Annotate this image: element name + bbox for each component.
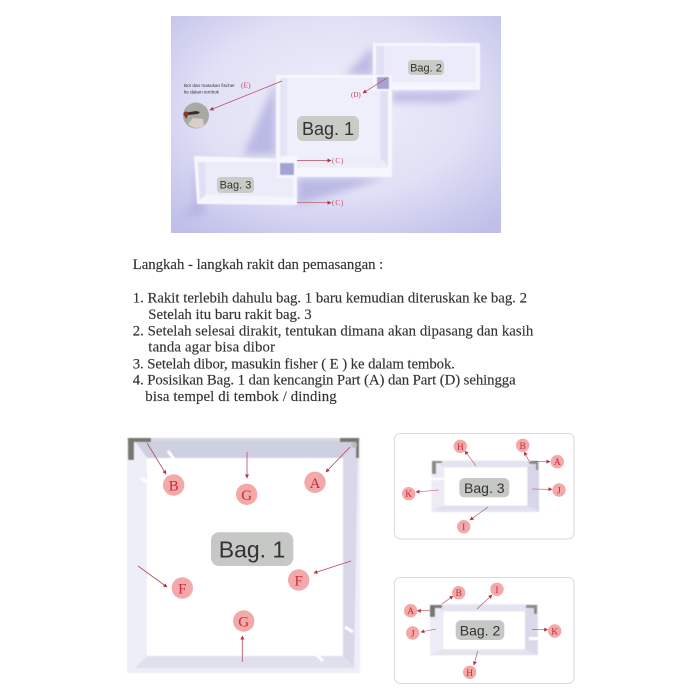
shelf: Bag 1 <box>276 75 392 177</box>
metal brackets <box>128 438 151 460</box>
callout H: H <box>466 669 473 679</box>
callout A: A <box>554 458 561 468</box>
callout G top <box>236 452 257 505</box>
note: drill and insert fischer <box>184 80 251 94</box>
step 1 <box>133 291 527 323</box>
callout G bottom: G <box>238 614 249 630</box>
step 1: 1. Rakit terlebih dahulu bag. 1 baru kemudian diteruskan ke bag. 2 <box>133 291 527 307</box>
callout A: A <box>310 476 321 492</box>
shelf: Bag 3 <box>194 156 297 205</box>
callout F left <box>138 566 193 599</box>
heading: Langkah - langkah rakit dan pemasangan : <box>133 257 383 273</box>
shelf frame <box>127 438 360 673</box>
arrow: part D <box>363 78 387 93</box>
arrow: part C upper <box>297 160 331 162</box>
callout H <box>463 651 478 679</box>
shelf shadows <box>180 46 480 216</box>
shelf frame <box>431 461 539 512</box>
callout H <box>454 440 476 466</box>
label: Bag. 1: Bag. 1 <box>219 536 285 562</box>
label: Bag. 3 on photo <box>217 177 254 193</box>
label: Bag. 2 <box>456 620 504 640</box>
callout A <box>404 604 430 617</box>
arrow: to drilling circle <box>210 81 282 110</box>
callout K: K <box>405 490 412 500</box>
callout J <box>406 626 436 640</box>
shelf frame <box>430 604 538 655</box>
label: Bag. 3 on photo: Bag. 3 <box>220 180 251 192</box>
callout B <box>147 443 184 496</box>
step 2: 2. Setelah selesai dirakit, tentukan dimana akan dipasang dan kasih <box>133 323 534 339</box>
callout F left: F <box>178 582 186 598</box>
label: Bag. 1 on photo <box>297 116 359 141</box>
step 2 <box>133 323 534 356</box>
label: part C lower: (C) <box>332 199 344 207</box>
panel: Bag 2 diagram <box>394 578 574 684</box>
callout B <box>516 439 529 461</box>
callout J: J <box>411 630 415 640</box>
callout A <box>532 455 564 468</box>
panel: Bag 3 diagram <box>394 434 574 539</box>
label: Bag. 2: Bag. 2 <box>460 622 500 638</box>
callout K <box>532 624 561 638</box>
photo: assembled wall shelves <box>171 16 501 233</box>
instructions text block <box>133 257 534 405</box>
callout H: H <box>457 443 464 453</box>
label: Bag. 1 on photo: Bag. 1 <box>302 119 354 139</box>
panel: Bag 1 diagram <box>127 438 360 673</box>
callout K: K <box>551 628 558 638</box>
label: part D: (D) <box>351 91 361 99</box>
step 4: 4. Posisikan Bag. 1 dan kencangin Part (A) dan Part (D) sehingga <box>133 373 516 389</box>
arrow: part C lower <box>297 202 331 204</box>
note: drill and insert fischer: ke dalam tembok <box>184 90 220 94</box>
step 2: tanda agar bisa dibor <box>148 340 275 356</box>
callout J <box>532 483 566 497</box>
label: part C upper: (C) <box>332 157 344 165</box>
note: drill and insert fischer: (E) <box>241 80 251 90</box>
label: Bag. 1 <box>211 532 293 566</box>
callout I: I <box>462 523 465 533</box>
step 1: Setelah itu baru rakit bag. 3 <box>148 307 312 323</box>
callout F right: F <box>295 574 303 590</box>
callout I <box>477 583 504 609</box>
callout A: A <box>407 607 414 617</box>
callout I: I <box>495 586 499 596</box>
label: Bag. 2 on photo: Bag. 2 <box>410 62 442 74</box>
callout B: B <box>169 478 179 494</box>
callout I <box>457 507 488 533</box>
callout F right <box>288 561 351 591</box>
label: Bag. 3 <box>459 478 509 497</box>
note: drill and insert fischer: Bor dan masukan fischer <box>184 83 235 88</box>
callout K <box>402 487 439 500</box>
callout J: J <box>557 486 561 496</box>
label: Bag. 3: Bag. 3 <box>464 480 505 496</box>
callout G top: G <box>241 488 252 504</box>
callout B: B <box>520 442 526 452</box>
callout B <box>442 586 465 604</box>
white notches <box>141 451 353 661</box>
step 4 <box>133 373 516 405</box>
step 3: 3. Setelah dibor, masukin fisher ( E ) ke dalam tembok. <box>133 356 455 372</box>
callout G bottom <box>233 610 254 662</box>
callout B: B <box>456 589 462 599</box>
icon: drilling photo circle <box>183 102 209 128</box>
step 4: bisa tempel di tembok / dinding <box>145 389 337 405</box>
callout A <box>304 447 350 493</box>
shelf: Bag 2 <box>373 43 480 90</box>
